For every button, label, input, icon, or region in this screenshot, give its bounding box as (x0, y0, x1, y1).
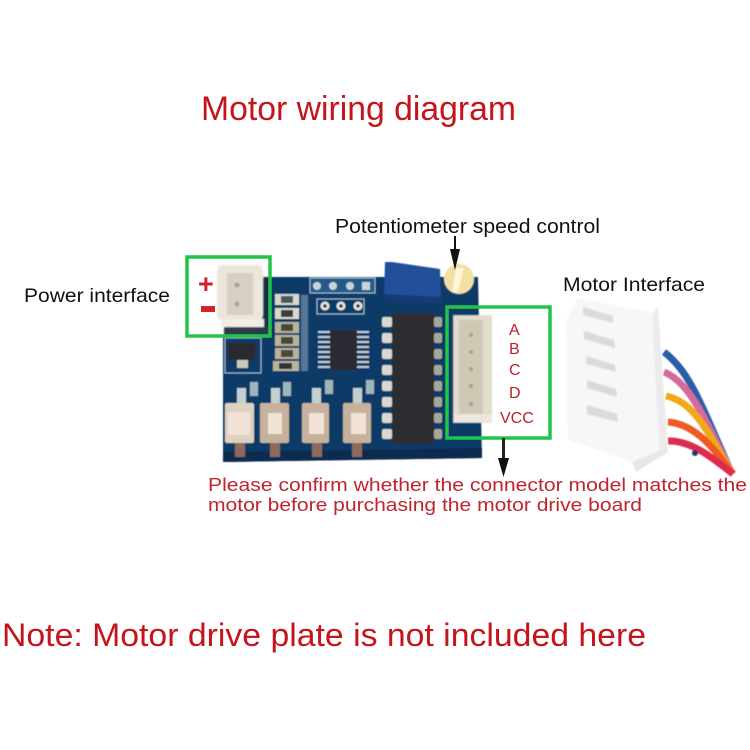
pin labels: C (509, 362, 521, 379)
pin labels: D (509, 385, 521, 402)
pin labels (500, 322, 534, 427)
green box: power interface (187, 257, 270, 336)
bottom note: Note: Motor drive plate is not included here (2, 617, 646, 653)
label: potentiometer speed control: Potentiometer speed control (335, 216, 600, 238)
red notice (208, 474, 747, 515)
red notice: Please confirm whether the connector model matches the (208, 474, 747, 495)
DIP chip (382, 313, 442, 444)
tactile buttons (225, 380, 374, 457)
motor board connector (453, 315, 492, 423)
pin labels: VCC (500, 410, 534, 427)
arrow: to potentiometer (450, 236, 460, 270)
SOP chip (318, 330, 369, 370)
red notice: motor before purchasing the motor drive board (208, 494, 642, 515)
pin labels: B (509, 341, 520, 358)
plus sign: + (198, 269, 214, 299)
minus sign (201, 306, 215, 312)
green box: motor connector (447, 307, 550, 438)
title: Motor wiring diagram (201, 90, 516, 128)
label: motor interface: Motor Interface (563, 274, 705, 296)
power connector (217, 265, 270, 335)
label: power interface: Power interface (24, 285, 170, 307)
pin header pads (310, 278, 375, 314)
motor wires (664, 352, 733, 474)
regulator chip (225, 338, 261, 373)
blue trimmer potentiometer (384, 262, 474, 303)
arrow: to notice (498, 438, 509, 477)
circuit board (223, 262, 482, 462)
motor plug (566, 298, 668, 472)
pin labels: A (509, 322, 520, 339)
resistors column (273, 294, 308, 371)
